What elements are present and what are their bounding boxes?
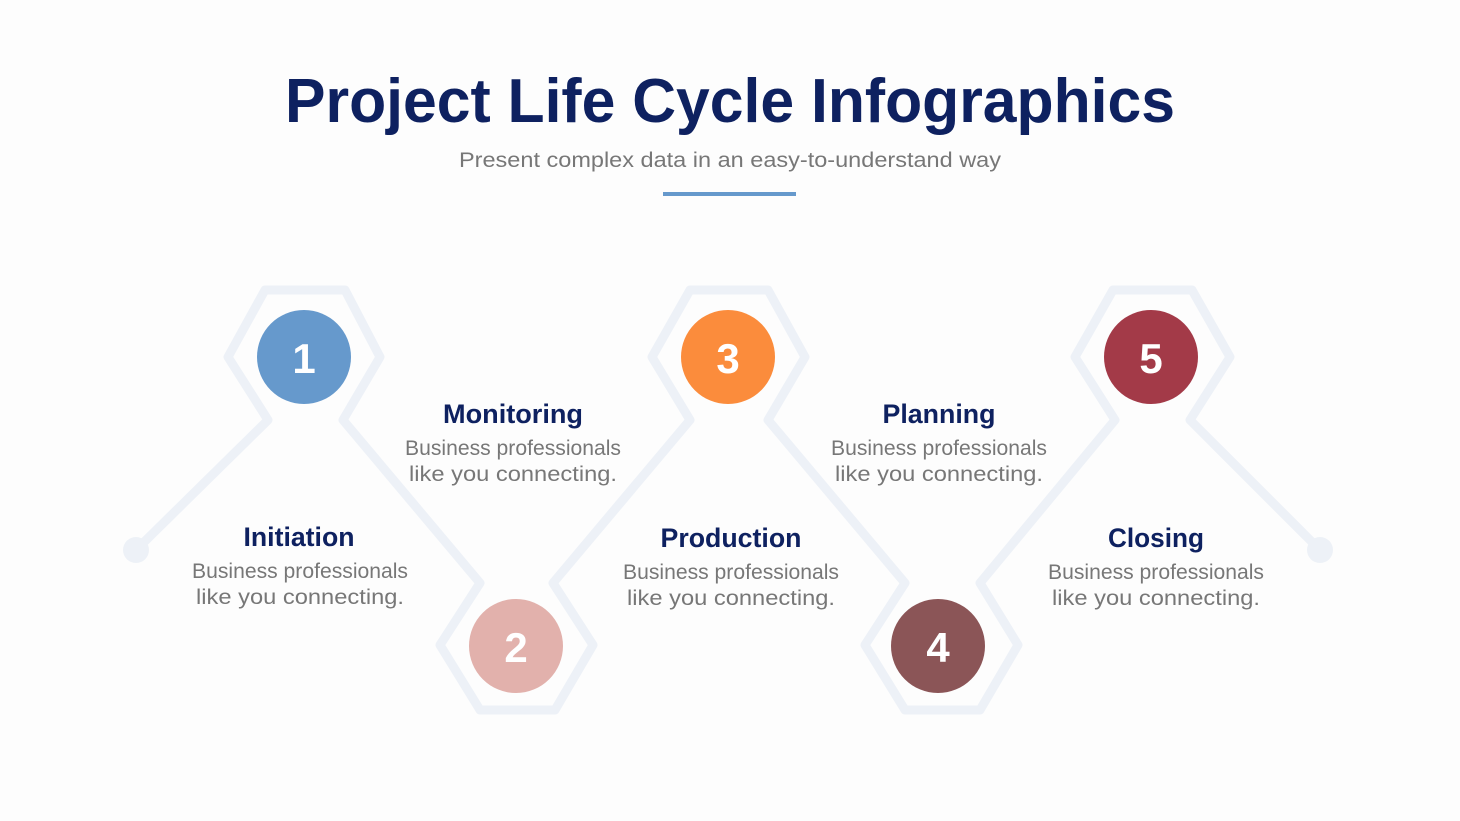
text: Production: Production — [660, 523, 802, 553]
hexagon connector path — [136, 290, 1320, 710]
text: Closing — [1048, 523, 1264, 610]
text: Closing: Business professionals — [1048, 561, 1264, 584]
text: Initiation — [192, 522, 408, 609]
step 3 circle — [681, 310, 775, 404]
text: Production: Business professionals — [623, 561, 839, 584]
step 5 circle: 5 — [1139, 335, 1163, 382]
text: Monitoring: Monitoring — [443, 399, 583, 429]
text: Production — [623, 523, 839, 610]
step 1 circle — [257, 310, 351, 404]
text: Planning: Business professionals — [831, 437, 1047, 460]
subtitle: Present complex data in an easy-to-understand way — [459, 149, 1002, 172]
step 4 circle — [891, 599, 985, 693]
text: Initiation: Business professionals — [192, 560, 408, 583]
text: Closing: like you connecting. — [1052, 587, 1260, 610]
step 4 circle: 4 — [926, 624, 950, 671]
text: Monitoring — [405, 399, 621, 486]
text: Monitoring: like you connecting. — [409, 463, 617, 486]
step 3 circle: 3 — [716, 335, 740, 382]
text: Planning: like you connecting. — [835, 463, 1043, 486]
text: Planning — [831, 399, 1047, 486]
step 2 circle — [469, 599, 563, 693]
text: Planning: Planning — [882, 399, 996, 429]
step 1 circle: 1 — [292, 335, 316, 382]
text: Initiation: like you connecting. — [196, 586, 404, 609]
text: Production: like you connecting. — [627, 587, 835, 610]
text: Initiation: Initiation — [244, 522, 354, 552]
accent bar — [663, 192, 796, 196]
end dot left — [123, 537, 149, 563]
text: Monitoring: Business professionals — [405, 437, 621, 460]
end dot right — [1307, 537, 1333, 563]
text: Closing: Closing — [1108, 523, 1204, 553]
title: Project Life Cycle Infographics — [285, 67, 1175, 136]
step 2 circle: 2 — [504, 624, 528, 671]
step 5 circle — [1104, 310, 1198, 404]
